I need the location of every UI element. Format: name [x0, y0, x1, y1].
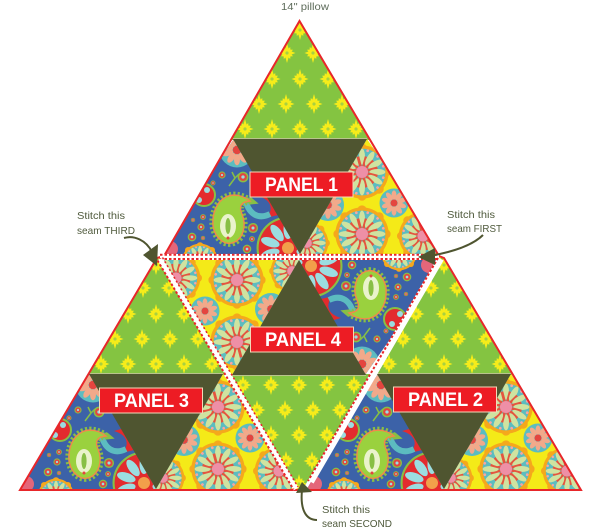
heading: 14 inch pillow: 14" pillow	[281, 1, 329, 13]
callout: stitch this seam third: Stitch this	[77, 210, 125, 222]
seam second: right diagonal dotted stitching	[308, 258, 441, 482]
seam third: left diagonal dotted stitching	[158, 258, 298, 490]
label: panel 2: PANEL 2	[408, 390, 483, 411]
callout: stitch this seam third	[77, 210, 135, 237]
label: panel 4	[250, 327, 354, 352]
callout: stitch this seam second	[322, 504, 392, 530]
seam first: horizontal dotted stitching	[160, 255, 439, 259]
callout: stitch this seam second: Stitch this	[322, 504, 370, 516]
callout: stitch this seam first	[447, 209, 503, 235]
panel 3 fabric triangle	[22, 258, 293, 489]
label: panel 3	[100, 388, 202, 413]
label: panel 1: PANEL 1	[265, 175, 338, 196]
arrow: to third seam	[124, 237, 158, 266]
label: panel 4: PANEL 4	[265, 330, 341, 351]
callout: stitch this seam first: Stitch this	[447, 209, 495, 221]
arrow: to second seam	[296, 482, 317, 520]
arrow: to first seam	[418, 235, 483, 265]
label: panel 2	[394, 387, 496, 412]
callout: stitch this seam first: seam FIRST	[447, 223, 503, 235]
callout: stitch this seam second: seam SECOND	[322, 518, 392, 530]
label: panel 1	[250, 172, 353, 197]
label: panel 3: PANEL 3	[114, 391, 189, 412]
panel 4 fabric triangle	[159, 258, 436, 489]
panel 2 fabric triangle	[308, 258, 580, 489]
panel 1 fabric triangle	[166, 23, 442, 259]
callout: stitch this seam third: seam THIRD	[77, 225, 135, 237]
